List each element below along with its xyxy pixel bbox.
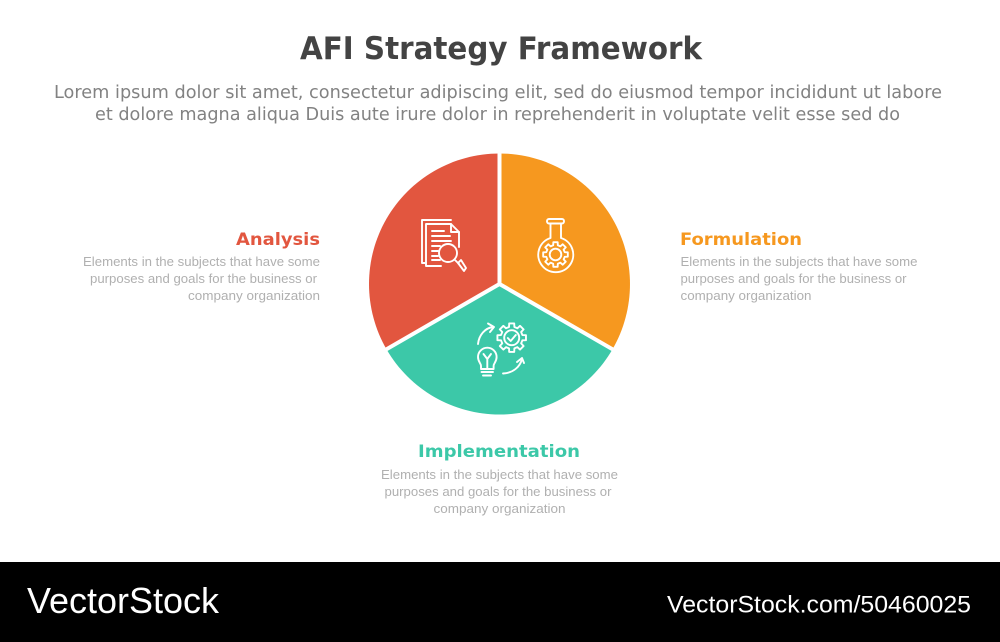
description: analysis	[83, 255, 320, 303]
pie chart	[369, 150, 630, 414]
subtitle text	[54, 83, 942, 125]
description: implementation: purposes and goals for the business or	[384, 485, 612, 499]
label: implementation	[381, 442, 618, 516]
description: formulation: purposes and goals for the business or	[680, 272, 906, 286]
description: implementation: Elements in the subjects that have some	[381, 468, 618, 482]
icon: gear, bulb and cycle arrows	[478, 323, 526, 376]
heading: implementation: Implementation	[418, 442, 580, 462]
description: formulation	[680, 255, 918, 303]
description: implementation	[381, 468, 618, 516]
segment: implementation	[386, 284, 612, 414]
subtitle text: et dolore magna aliqua Duis aute irure dolor in reprehenderit in voluptate velit esse sed do	[95, 105, 900, 125]
description: analysis: company organization	[188, 289, 320, 303]
description: analysis: purposes and goals for the business or	[90, 272, 317, 286]
heading: analysis: Analysis	[236, 230, 320, 250]
footer image id: VectorStock.com/50460025	[667, 592, 971, 618]
segment: formulation	[500, 154, 630, 349]
label: analysis	[83, 230, 320, 303]
icon: document with magnifier	[422, 220, 466, 271]
icon: flask with gear	[538, 219, 573, 272]
subtitle text: Lorem ipsum dolor sit amet, consectetur adipiscing elit, sed do eiusmod tempor incididunt ut labore	[54, 83, 942, 103]
description: implementation: company organization	[434, 502, 566, 516]
label: formulation	[680, 230, 918, 303]
description: formulation: company organization	[680, 289, 812, 303]
footer logo text: VectorStock	[27, 580, 220, 621]
segment: analysis	[369, 154, 500, 349]
title: AFI Strategy Framework	[300, 31, 703, 67]
description: formulation: Elements in the subjects that have some	[680, 255, 918, 269]
description: analysis: Elements in the subjects that have some	[83, 255, 320, 269]
heading: formulation: Formulation	[680, 230, 802, 250]
footer band	[0, 562, 1000, 642]
